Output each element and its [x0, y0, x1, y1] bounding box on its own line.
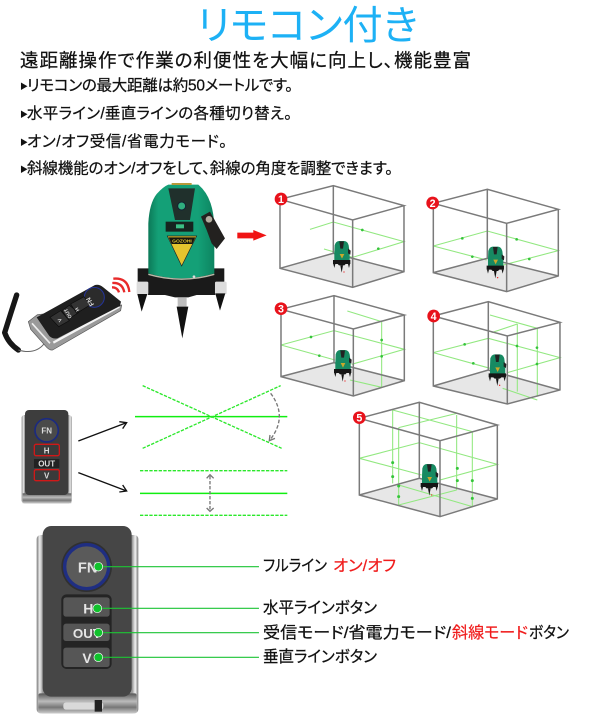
label: vertical button: 垂直ラインボタン: [263, 648, 377, 666]
line adjustment section: [22, 386, 287, 515]
laser level: GOZOHI: [172, 239, 192, 245]
feature: diagonal lines: 斜線機能のオン/オフをして、斜線の角度を調整できます。: [27, 160, 393, 178]
small remote: FN: [41, 426, 52, 435]
diagram 3: 3: [278, 304, 284, 316]
small remote: V: [44, 472, 50, 481]
diagram 4: [427, 302, 560, 404]
product photo group: [5, 183, 267, 352]
feature: range: リモコンの最大距離は約50メートルです。: [27, 76, 293, 94]
small remote: OUT: [38, 459, 55, 468]
small remote: [22, 410, 72, 503]
title: リモコン付き: [197, 4, 418, 48]
remote body: V: [82, 650, 92, 666]
diagram 5: 5: [356, 413, 362, 425]
diagram 1: 1: [278, 194, 284, 206]
subtitle: 遠距離操作で作業の利便性を大幅に向上し、機能豊富: [20, 50, 471, 71]
tilted remote: V: [57, 316, 64, 323]
feature: line switching: ▶: [20, 110, 28, 119]
tilted remote: OUT: [63, 307, 74, 319]
label: mode button: ボタン: [529, 624, 569, 642]
red arrow: [237, 230, 267, 241]
arrow up: [78, 422, 127, 441]
label: full line: オン/オフ: [333, 558, 396, 575]
small remote: H: [44, 446, 50, 455]
diagram 5: [353, 402, 497, 517]
large remote with callouts: [37, 526, 259, 713]
diagonal lines diagram: [135, 386, 287, 448]
room diagrams 1 to 4: [275, 186, 560, 404]
diagram 1: [275, 186, 404, 287]
label: mode button: [263, 624, 569, 642]
remote body: H: [83, 601, 93, 617]
callout lines: [93, 562, 259, 662]
parallel lines diagram: [140, 471, 287, 515]
label: mode button: 受信モード/省電力モード/: [263, 624, 452, 642]
feature: diagonal lines: ▶: [20, 165, 28, 174]
diagram 2: 2: [430, 198, 436, 210]
feature: receive and power save: ▶: [20, 138, 28, 147]
remote body: OUT: [73, 626, 101, 641]
diagram 2: [426, 189, 558, 292]
diagram 3: [275, 296, 404, 396]
label: full line: フルライン: [263, 558, 327, 575]
arrow down: [78, 473, 127, 492]
tilted remote: FN: [85, 296, 96, 307]
feature: line switching: 水平ライン/垂直ラインの各種切り替え。: [27, 104, 292, 122]
remote body: [37, 526, 138, 713]
label: mode button: 斜線モード: [452, 624, 528, 642]
remote body: FN: [78, 561, 97, 577]
label: full line: [263, 558, 396, 575]
diagram 4: 4: [431, 311, 437, 323]
label: horizontal button: 水平ラインボタン: [263, 599, 377, 617]
feature: range: ▶: [20, 82, 28, 91]
tilted remote: [5, 285, 122, 352]
feature list: [20, 76, 393, 178]
wireless signal: [112, 279, 129, 292]
tilted remote: H: [74, 306, 81, 312]
laser level: [137, 183, 227, 338]
feature: receive and power save: オン/オフ受信/省電力モード。: [27, 132, 227, 150]
